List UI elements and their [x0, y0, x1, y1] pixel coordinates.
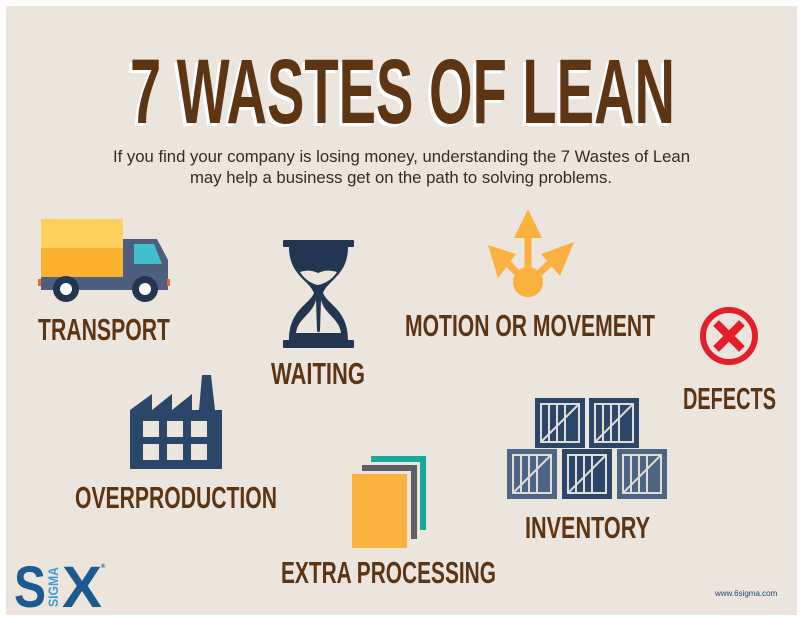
- website: www.6sigma.com: [714, 589, 778, 598]
- label: transport: TRANSPORT: [38, 312, 170, 347]
- icon: factory: [130, 375, 222, 469]
- subtitle: If you find your company is losing money, understanding the 7 Wastes of Lean: [113, 147, 690, 166]
- label: extra processing: EXTRA PROCESSING: [281, 555, 496, 590]
- icon: papers: [352, 456, 426, 548]
- label: waiting: WAITING: [271, 356, 365, 391]
- subtitle: may help a business get on the path to solving problems.: [190, 168, 612, 187]
- logo: six sigma: SIGMA: [45, 567, 61, 607]
- label: overproduction: OVERPRODUCTION: [75, 480, 277, 515]
- icon: truck: [38, 219, 170, 302]
- label: motion or movement: MOTION OR MOVEMENT: [405, 308, 655, 343]
- logo: six sigma: [14, 555, 106, 620]
- subtitle: [113, 147, 690, 187]
- logo: six sigma: X: [62, 555, 102, 620]
- icon: crates: [507, 398, 667, 499]
- logo: six sigma: ®: [101, 563, 106, 570]
- label: inventory: INVENTORY: [525, 510, 650, 545]
- icon: motion arrows: [488, 209, 574, 297]
- icon: defects: [703, 310, 755, 362]
- icon: hourglass: [283, 240, 354, 348]
- logo: six sigma: S: [14, 555, 46, 620]
